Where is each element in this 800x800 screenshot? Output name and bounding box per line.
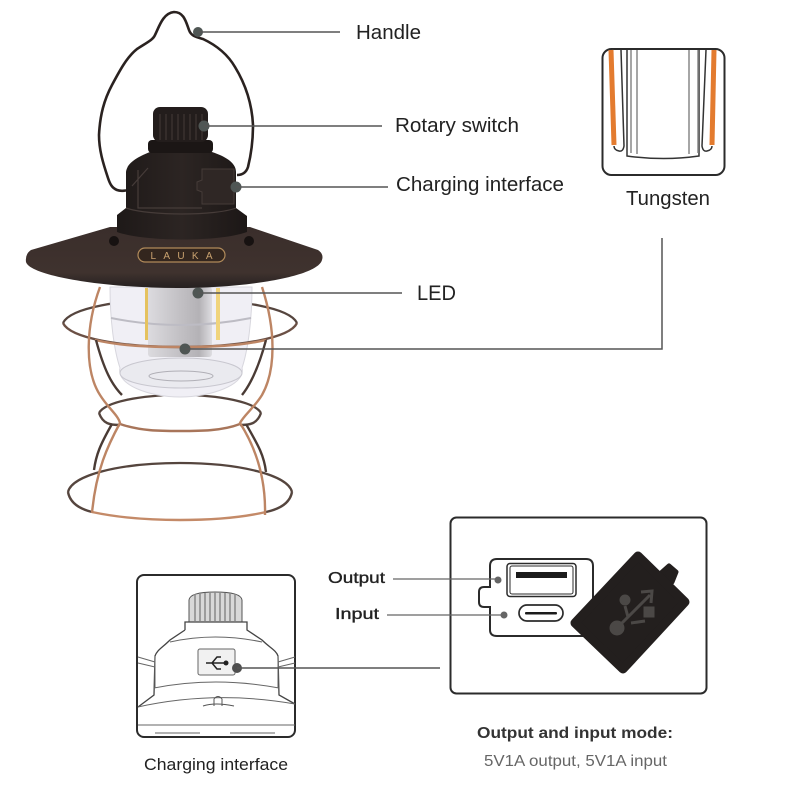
- callout line: tungsten: [180, 238, 662, 354]
- shade screws: [109, 236, 254, 246]
- mode description: 5V1A output, 5V1A input: [484, 753, 668, 770]
- callout: input: [335, 606, 508, 623]
- callout: handle: Handle: [356, 22, 421, 44]
- lantern body: [117, 152, 247, 240]
- panel: charging interface: [137, 575, 295, 737]
- lantern illustration: [26, 12, 322, 520]
- metal cage: [63, 287, 297, 520]
- rubber cover: [575, 556, 685, 669]
- callout: rotary switch: Rotary switch: [395, 115, 519, 137]
- charging connector line: [232, 663, 440, 673]
- callout: input: Input: [335, 606, 380, 623]
- mode heading: Output and input mode:: [477, 725, 673, 742]
- callout: output: Output: [328, 570, 386, 587]
- body collar: [148, 140, 213, 153]
- usb port cover: [198, 649, 235, 675]
- label: charging interface: Charging interface: [144, 756, 288, 774]
- brand plate: [138, 248, 225, 262]
- usb symbol on cover: [611, 591, 653, 634]
- port plate: [479, 559, 593, 636]
- callout: handle: [193, 22, 421, 44]
- brand plate: LAUKA: [150, 251, 213, 262]
- charging panel knob: [189, 592, 242, 622]
- panel: tungsten filament: [602, 49, 724, 175]
- lantern glass globe: [110, 287, 252, 397]
- callout: LED: LED: [417, 282, 456, 305]
- usb-c port: [519, 605, 563, 621]
- charging panel lantern body: [138, 622, 295, 707]
- callout: charging interface: [230, 174, 564, 196]
- panel: output and input ports: [450, 518, 706, 694]
- cage back wires: [63, 299, 297, 492]
- callout: rotary switch: [198, 115, 519, 137]
- lantern handle: [99, 12, 253, 191]
- callout: LED: [192, 282, 456, 305]
- body panel detail: [126, 168, 236, 214]
- rotary knob: [153, 107, 208, 142]
- usb-a port: [507, 564, 576, 596]
- charging panel bulb mark: [203, 696, 234, 706]
- callout: output: [328, 570, 502, 587]
- callout: charging interface: Charging interface: [396, 174, 564, 196]
- label: tungsten: Tungsten: [626, 188, 710, 210]
- charging cover: [197, 169, 234, 204]
- lantern shade: [26, 227, 322, 288]
- usb symbol: [206, 657, 228, 669]
